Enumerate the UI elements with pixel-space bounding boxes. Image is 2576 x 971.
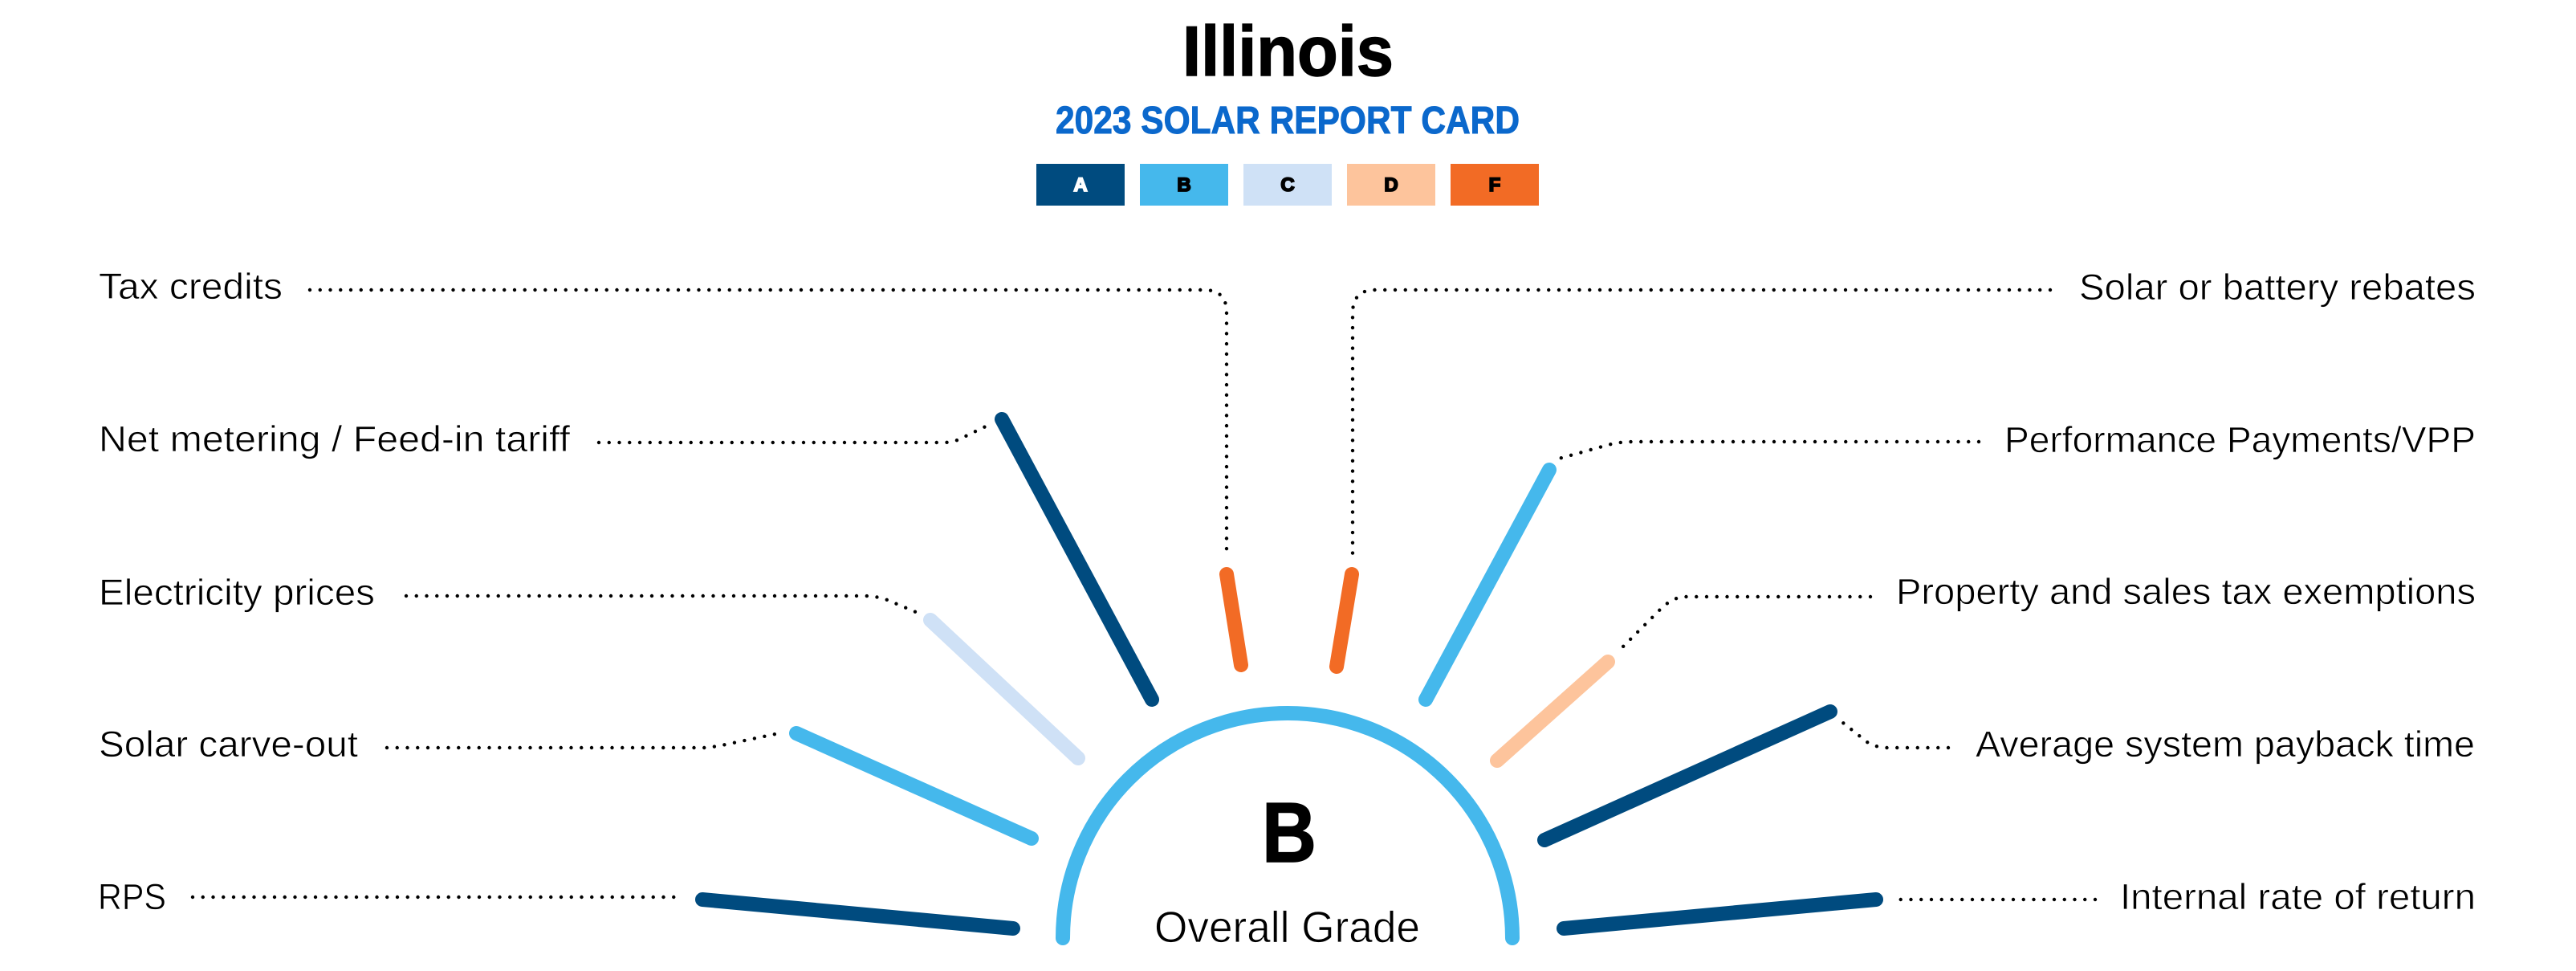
metric: Electricity prices, grade C [99,572,1078,758]
subtitle: 2023 SOLAR REPORT CARD [1056,100,1520,142]
metric: Net metering / Feed-in tariff, grade A [99,418,1152,700]
label: Tax credits [99,266,283,307]
grade bar [930,620,1078,758]
metric: Solar carve-out, grade B [99,724,1032,838]
legend item A: A [1073,174,1088,196]
legend item D [1347,164,1435,206]
connector [599,424,991,443]
connector [1559,442,1979,459]
label: Solar carve-out [99,724,359,765]
label: Solar or battery rebates [2079,267,2476,308]
metric: Solar or battery rebates, grade F [1337,267,2476,667]
legend item B: B [1177,174,1191,196]
metric: Internal rate of return, grade A [1564,876,2476,928]
legend item B [1140,164,1228,206]
legend item D: D [1384,174,1398,196]
legend item A [1036,164,1125,206]
grade bar [1337,574,1352,667]
connector [1618,597,1870,652]
legend item C [1243,164,1332,206]
label: Net metering / Feed-in tariff [99,418,571,459]
legend item F: F [1489,174,1500,196]
connector [387,732,783,748]
grade bar [1544,712,1830,840]
metric: Performance Payments/VPP, grade B [1426,419,2476,700]
metric: RPS, grade A [98,876,1013,928]
overall grade gauge [1063,713,1512,952]
grade bar [702,900,1013,928]
overall grade caption: Overall Grade [1154,902,1420,952]
label: Electricity prices [99,572,375,613]
grade bar [796,733,1032,838]
legend item F [1451,164,1539,206]
connector [1353,290,2050,556]
arch in grade B colour [1063,713,1512,938]
grade bar [1002,419,1152,700]
label: Average system payback time [1976,724,2475,765]
connector [193,896,682,899]
connector [1894,898,2095,901]
connector [310,290,1227,556]
metric: Property and sales tax exemptions, grade D [1497,571,2476,761]
label: RPS [98,876,166,917]
title: Illinois [1182,11,1394,91]
label: Performance Payments/VPP [2004,419,2476,460]
overall grade letter: B [1262,785,1316,880]
grade bar [1497,662,1608,761]
metric: Tax credits, grade F [99,266,1241,665]
connector [1839,720,1948,748]
grade bar [1564,900,1876,928]
grade bar [1426,470,1549,700]
label: Internal rate of return [2120,876,2476,917]
legend item C: C [1280,174,1295,196]
label: Property and sales tax exemptions [1896,571,2476,612]
legend: grade scale [1036,164,1539,206]
metric: Average system payback time, grade A [1544,712,2475,840]
grade bar [1227,574,1241,665]
connector [406,596,918,613]
